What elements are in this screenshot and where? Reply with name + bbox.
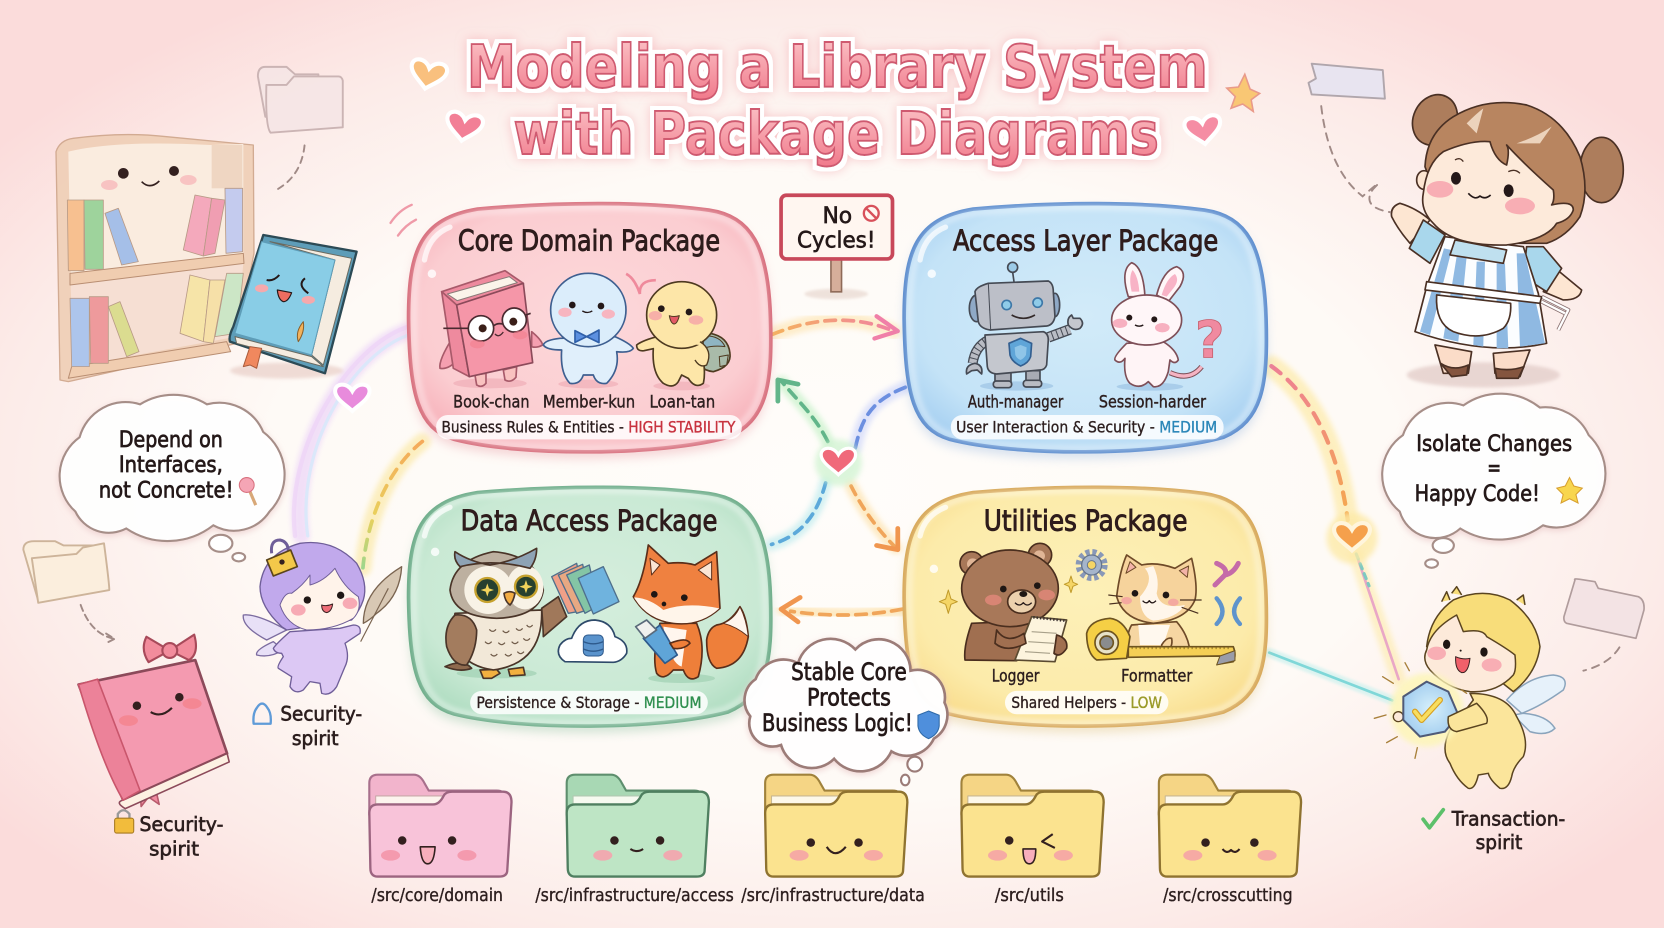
label: Loan-tan: Loan-tan bbox=[649, 393, 715, 412]
label: Transaction-spirit bbox=[1423, 808, 1565, 854]
icon: orange heart bbox=[408, 58, 448, 92]
icon: hair lock bbox=[267, 540, 297, 576]
icon: prohibition mark bbox=[864, 206, 879, 221]
connector: dashed data to core bbox=[363, 441, 422, 568]
folder: core domain bbox=[369, 775, 512, 877]
thought bubble: isolate changes bbox=[1382, 394, 1605, 540]
icon: small heart mark bbox=[626, 274, 656, 294]
label: Transaction-spirit: Transaction- bbox=[1451, 808, 1565, 831]
thought bubble: stable core: Protects bbox=[807, 683, 891, 712]
thought bubble: depend on interfaces: Interfaces, bbox=[119, 452, 223, 478]
bracket Y bbox=[1215, 563, 1238, 585]
icon: faded tab top right bbox=[1308, 64, 1385, 99]
dashed line: top left folder bbox=[278, 145, 305, 189]
title line 1: Modeling a Library System bbox=[467, 33, 1208, 101]
character group bbox=[445, 545, 748, 683]
folder: infrastructure data bbox=[765, 775, 907, 877]
arrow: heart to utilities bbox=[851, 486, 898, 550]
thought bubble: depend on interfaces: not Concrete! bbox=[99, 478, 233, 504]
icon: faded folder right bbox=[1564, 579, 1644, 638]
sparkles bbox=[939, 576, 1078, 613]
label: Transaction-spirit: spirit bbox=[1476, 831, 1523, 854]
title line 2: with Package Diagrams bbox=[514, 100, 1159, 168]
icon: golden lock bbox=[115, 810, 134, 833]
label: Security-spirit under fairy: Security- bbox=[280, 703, 362, 726]
Loan-tan bbox=[637, 282, 730, 386]
label: Member-kun: Member-kun bbox=[543, 393, 635, 412]
label: Logger: Logger bbox=[992, 666, 1040, 685]
icon: central heart bbox=[815, 439, 862, 486]
character: Security-spirit fairy bbox=[243, 540, 402, 694]
label: Formatter: Formatter bbox=[1121, 666, 1192, 685]
folder: infrastructure access bbox=[567, 775, 709, 877]
icon: orange heart on right link bbox=[1327, 513, 1377, 564]
folder label: infrastructure data: /src/infrastructure/data bbox=[741, 886, 925, 906]
thought bubble: isolate changes: = bbox=[1487, 455, 1501, 481]
icon: bookshelf bbox=[56, 135, 254, 382]
tag: shared helpers: Shared Helpers - LOW bbox=[1011, 693, 1162, 712]
panel: access layer package bbox=[904, 204, 1266, 458]
icon: violet heart on arc bbox=[335, 385, 370, 411]
character group bbox=[939, 543, 1240, 665]
icon: green check bbox=[1423, 810, 1443, 828]
tape measure bbox=[1087, 618, 1235, 665]
panel: utilities package bbox=[904, 487, 1266, 733]
thought trail center bbox=[901, 757, 922, 785]
quote text: Depend on bbox=[119, 427, 223, 453]
character group bbox=[966, 262, 1202, 391]
bear bbox=[960, 543, 1067, 662]
gear bbox=[1079, 552, 1104, 578]
fox bbox=[633, 545, 748, 679]
thought trail right bbox=[1425, 538, 1454, 568]
dashed line: top right bbox=[1321, 106, 1390, 212]
icon: question mark: ? bbox=[1195, 312, 1225, 371]
label: Security-spirit under book: Security- bbox=[140, 813, 223, 836]
tag: user interaction: User Interaction & Security - MEDIUM bbox=[956, 417, 1217, 436]
icon: pink heart left bbox=[444, 111, 484, 144]
connector: utilities to transaction spirit bbox=[1269, 653, 1392, 700]
heading: Core Domain Package bbox=[458, 223, 720, 257]
label: Auth-manager: Auth-manager bbox=[968, 393, 1064, 412]
quote text: Isolate Changes bbox=[1416, 431, 1572, 457]
folder label: utils: /src/utils bbox=[995, 886, 1064, 906]
icon: faded folder left bbox=[23, 541, 109, 603]
Book-chan bbox=[440, 271, 543, 386]
label: Security-spirit under fairy bbox=[253, 703, 362, 750]
character: Transaction-spirit fairy bbox=[1374, 587, 1565, 788]
icon: shield bbox=[918, 711, 939, 739]
icon: star bbox=[1227, 74, 1260, 111]
icon: star bbox=[1557, 478, 1582, 503]
heading: Data Access Package bbox=[461, 504, 717, 538]
thought bubble: stable core bbox=[745, 639, 947, 771]
connector: access to transaction spirit bbox=[1271, 366, 1399, 679]
arrow: core to access bbox=[773, 316, 898, 339]
arrow: data to core link bbox=[772, 483, 826, 544]
Auth-manager robot bbox=[966, 262, 1082, 388]
panel: data access package bbox=[409, 487, 771, 733]
character group bbox=[440, 271, 730, 390]
icon: lollipop bbox=[239, 478, 256, 505]
title bbox=[408, 33, 1260, 168]
thought bubble: isolate changes: Happy Code! bbox=[1415, 481, 1540, 507]
icon: faded folder top left bbox=[258, 67, 343, 133]
icon: outline lock bbox=[253, 704, 271, 724]
Member-kun bbox=[543, 273, 633, 384]
sign: no cycles: Cycles! bbox=[797, 227, 876, 253]
label: Security-spirit under fairy: spirit bbox=[292, 727, 339, 750]
thought bubble: stable core: Business Logic! bbox=[762, 708, 913, 737]
thought bubble: depend on interfaces bbox=[60, 395, 285, 541]
folder label: core domain: /src/core/domain bbox=[371, 886, 503, 906]
heading: Access Layer Package bbox=[953, 223, 1218, 257]
label: Security-spirit under book: spirit bbox=[149, 837, 200, 860]
panel: core domain package bbox=[391, 204, 771, 458]
folder label: infrastructure access: /src/infrastructure/access bbox=[535, 886, 734, 906]
label: Book-chan: Book-chan bbox=[453, 393, 530, 412]
quote text: Stable Core bbox=[791, 657, 907, 686]
icon: blue book character bbox=[230, 235, 357, 379]
icon: feather bbox=[361, 567, 402, 642]
connector: rainbow arc to heart on left bbox=[294, 327, 408, 536]
icon: glowing gem bbox=[1374, 663, 1487, 758]
cloud database bbox=[558, 620, 627, 662]
arrow: utilities to data bbox=[781, 597, 902, 622]
sign: no cycles bbox=[781, 195, 892, 299]
label: Security-spirit under book bbox=[115, 810, 223, 860]
arrow: access to core through heart bbox=[778, 380, 905, 448]
owl bbox=[445, 548, 567, 678]
folder: utils bbox=[961, 775, 1104, 877]
icon: pink heart right bbox=[1184, 114, 1223, 146]
heading: Utilities Package bbox=[984, 504, 1188, 538]
cat bbox=[1108, 555, 1202, 652]
Session-harder bunny bbox=[1112, 263, 1202, 387]
tag: business rules: Business Rules & Entities - HIGH STABILITY bbox=[441, 417, 736, 436]
sign: no cycles: No bbox=[822, 203, 852, 229]
thought trail left bbox=[209, 535, 245, 561]
books bbox=[552, 563, 619, 614]
label: Session-harder: Session-harder bbox=[1099, 393, 1206, 412]
bracket pair bbox=[1217, 598, 1240, 624]
dashed arrow: left folder to book bbox=[81, 605, 115, 643]
folder label: crosscutting: /src/crosscutting bbox=[1163, 886, 1293, 906]
folder: crosscutting bbox=[1159, 775, 1301, 877]
icon: pink book with bow bbox=[79, 635, 229, 809]
character: girl with apron bbox=[1391, 87, 1623, 388]
tag: persistence: Persistence & Storage - MEDIUM bbox=[476, 693, 701, 712]
dashed line: right folder bbox=[1583, 647, 1619, 671]
